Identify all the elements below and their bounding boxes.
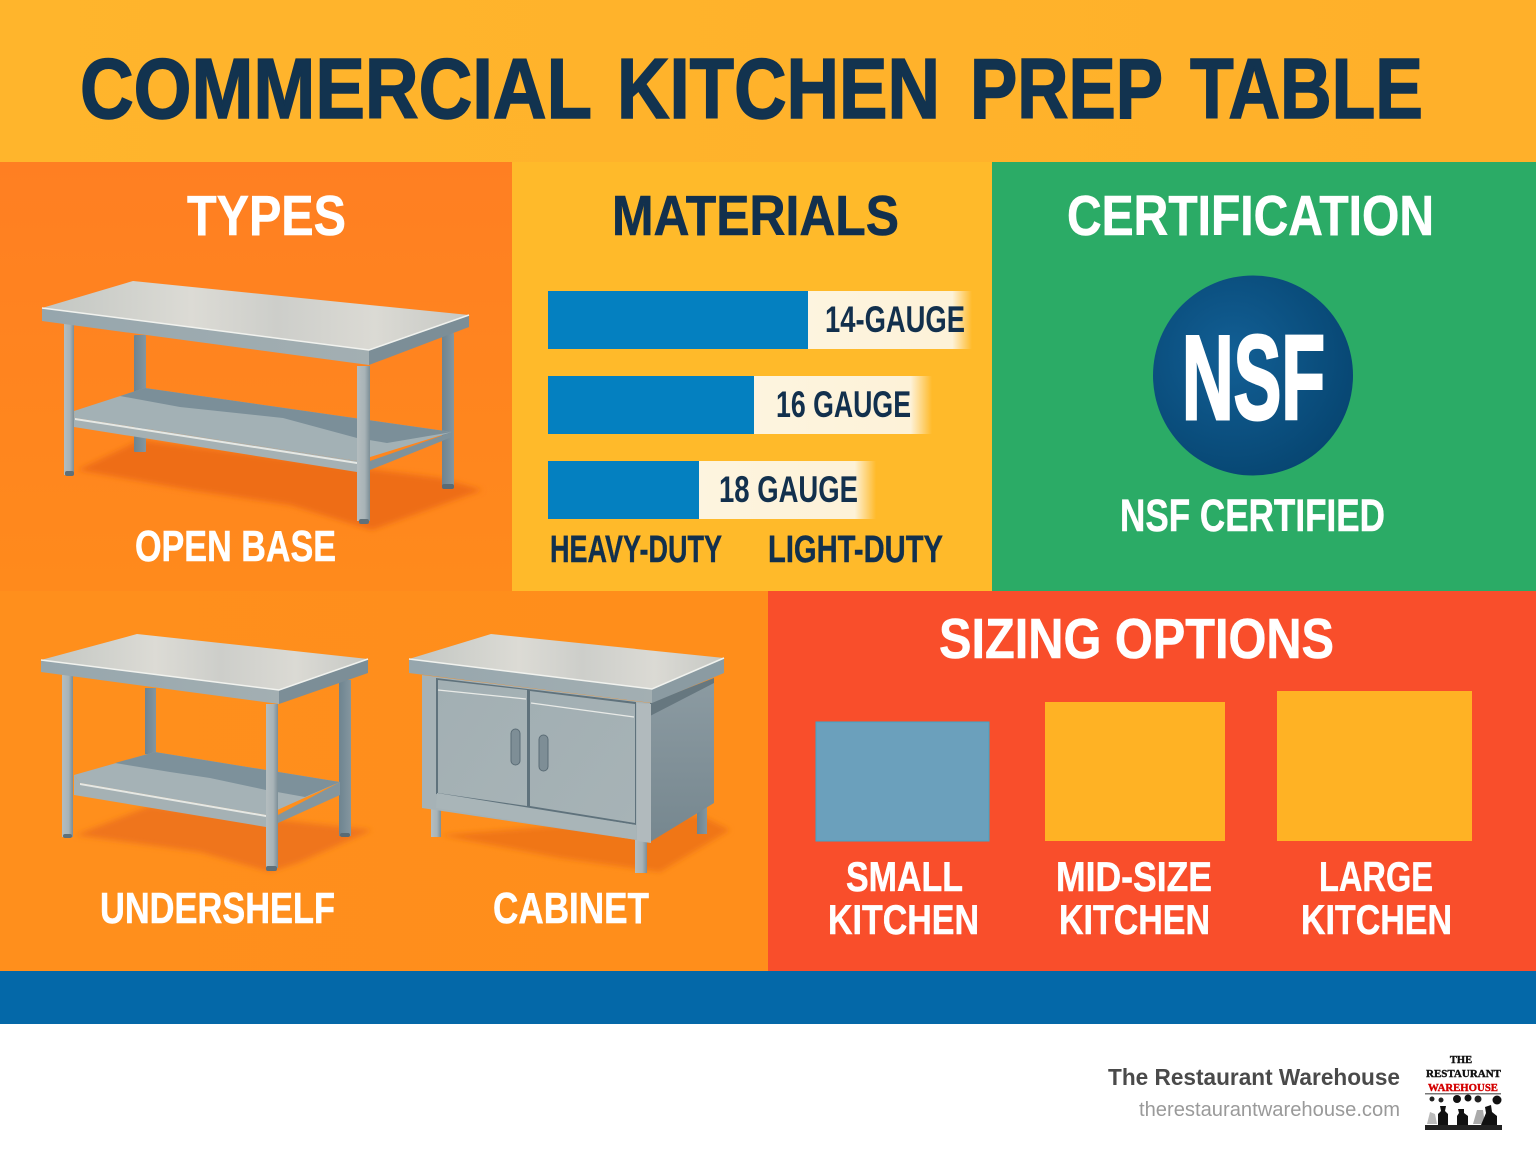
size: mid-size kitchen: KITCHEN: [1059, 896, 1210, 943]
title: TABLE: [1190, 42, 1423, 137]
icon: NSF badge: [1153, 276, 1353, 476]
label: undershelf: UNDERSHELF: [100, 884, 335, 933]
size: small kitchen: KITCHEN: [828, 896, 979, 943]
size: large kitchen: LARGE: [1319, 853, 1433, 900]
icon: NSF badge: NSF: [1182, 311, 1325, 445]
bar: 16 gauge: 16 GAUGE: [776, 384, 911, 425]
title banner: [0, 0, 1536, 162]
brand url: therestaurantwarehouse.com: [1139, 1099, 1400, 1121]
panel: materials: [512, 162, 992, 591]
size: small kitchen: SMALL: [846, 853, 963, 900]
illustration: undershelf table: [41, 634, 372, 872]
illustration: cabinet table: [409, 634, 730, 873]
title: PREP: [970, 42, 1163, 137]
bar: 16 gauge: [548, 376, 932, 434]
size: small kitchen: [816, 722, 989, 943]
panel: types: [0, 162, 512, 591]
footer brand: [1108, 1064, 1400, 1121]
heading: sizing options: SIZING OPTIONS: [939, 607, 1334, 671]
bar: 18 gauge: [548, 461, 876, 519]
logo: restaurant warehouse: WAREHOUSE: [1428, 1082, 1498, 1094]
bar: 14-gauge: 14-GAUGE: [825, 299, 965, 340]
heading: certification: CERTIFICATION: [1067, 184, 1434, 248]
bar: 14-gauge: [548, 291, 972, 349]
label: cabinet: CABINET: [493, 884, 649, 933]
title: KITCHEN: [617, 42, 940, 137]
illustration: open base table: [42, 281, 482, 530]
logo: restaurant warehouse: THE: [1450, 1055, 1472, 1066]
panel: undershelf and cabinet types: [0, 591, 768, 971]
logo: restaurant warehouse: RESTAURANT: [1426, 1068, 1502, 1080]
label: NSF certified: NSF CERTIFIED: [1120, 490, 1385, 541]
brand name: The Restaurant Warehouse: [1108, 1064, 1400, 1090]
blue footer band: [0, 971, 1536, 1024]
title: COMMERCIAL: [80, 42, 592, 137]
label: heavy-duty: HEAVY-DUTY: [550, 529, 722, 571]
title: [80, 42, 1423, 137]
label: open base: OPEN BASE: [135, 522, 336, 571]
heading: materials: MATERIALS: [612, 184, 899, 248]
panel: certification: [992, 162, 1536, 591]
panel: sizing options: [768, 591, 1536, 971]
size: large kitchen: KITCHEN: [1301, 896, 1452, 943]
heading: types: TYPES: [187, 184, 346, 248]
logo: restaurant warehouse: [1425, 1055, 1502, 1130]
bar: 18 gauge: 18 GAUGE: [719, 469, 858, 510]
size: mid-size kitchen: [1045, 702, 1225, 943]
size: mid-size kitchen: MID-SIZE: [1056, 853, 1212, 900]
size: large kitchen: [1277, 691, 1472, 943]
label: light-duty: LIGHT-DUTY: [768, 529, 943, 571]
